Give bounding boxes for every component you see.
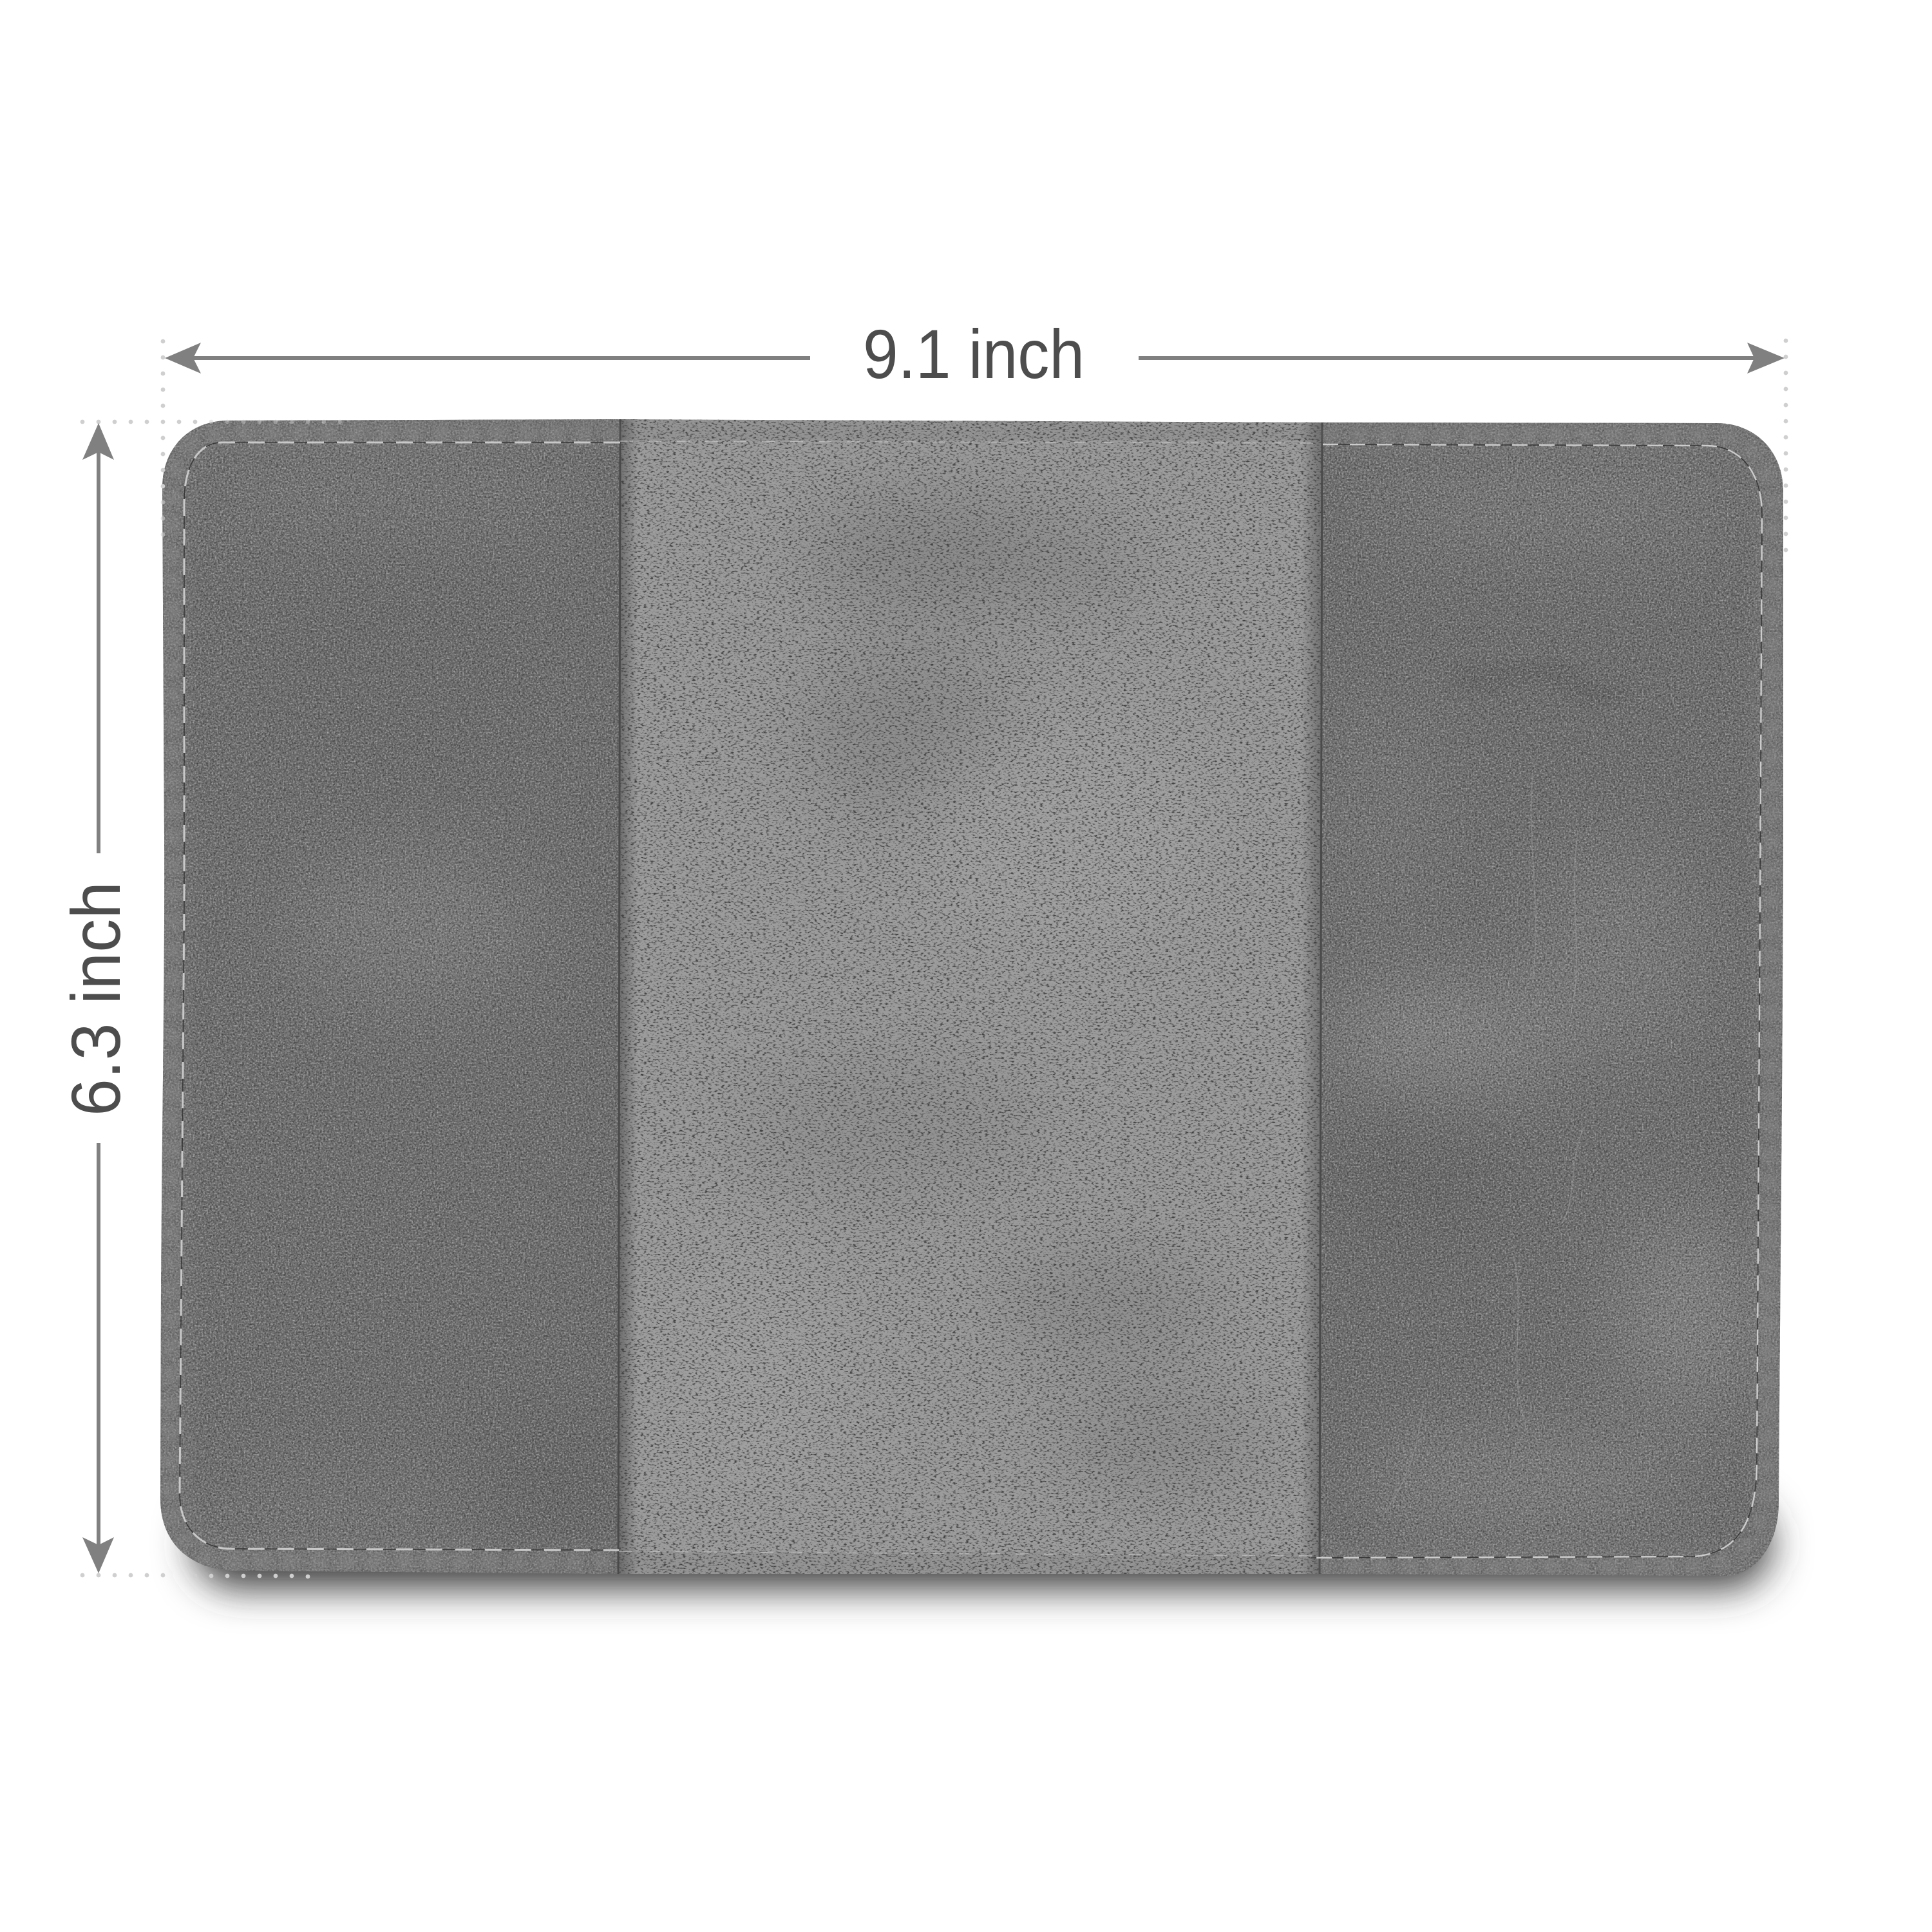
drop shadow under cover: [193, 1501, 1771, 1588]
dotted guide: right vertical: [1784, 339, 1788, 552]
dotted guide: top left horizontal: [80, 420, 342, 424]
passport cover: [155, 412, 1797, 1584]
worn halo around stitching: [169, 433, 1772, 1567]
stitching: left flap: [180, 442, 620, 1550]
dotted guide: bottom left horizontal: [80, 1573, 310, 1578]
infographic: passport cover with dimensions: [70, 328, 1801, 1622]
label: height: 6.3 inch: [57, 882, 135, 1116]
seams between leather and suede: [618, 419, 1322, 1576]
arrow: height, upper part: [82, 423, 114, 853]
lighter worn edge band of the flaps: [167, 426, 1776, 1569]
stitching: right flap: [1311, 444, 1762, 1558]
arrow: width, right part: [1139, 343, 1785, 374]
arrow: height, lower part: [82, 1143, 114, 1573]
dotted guide: left vertical: [161, 339, 165, 536]
arrow: width, left part: [165, 343, 810, 374]
panel: right leather flap: [1314, 412, 1797, 1584]
label: width: 9.1 inch: [863, 315, 1084, 393]
panel: centre suede lining: [612, 412, 1327, 1584]
stitching: centre panel: [619, 441, 1323, 1556]
panel: left leather flap: [155, 412, 631, 1584]
leather creases: [1385, 773, 1584, 1513]
